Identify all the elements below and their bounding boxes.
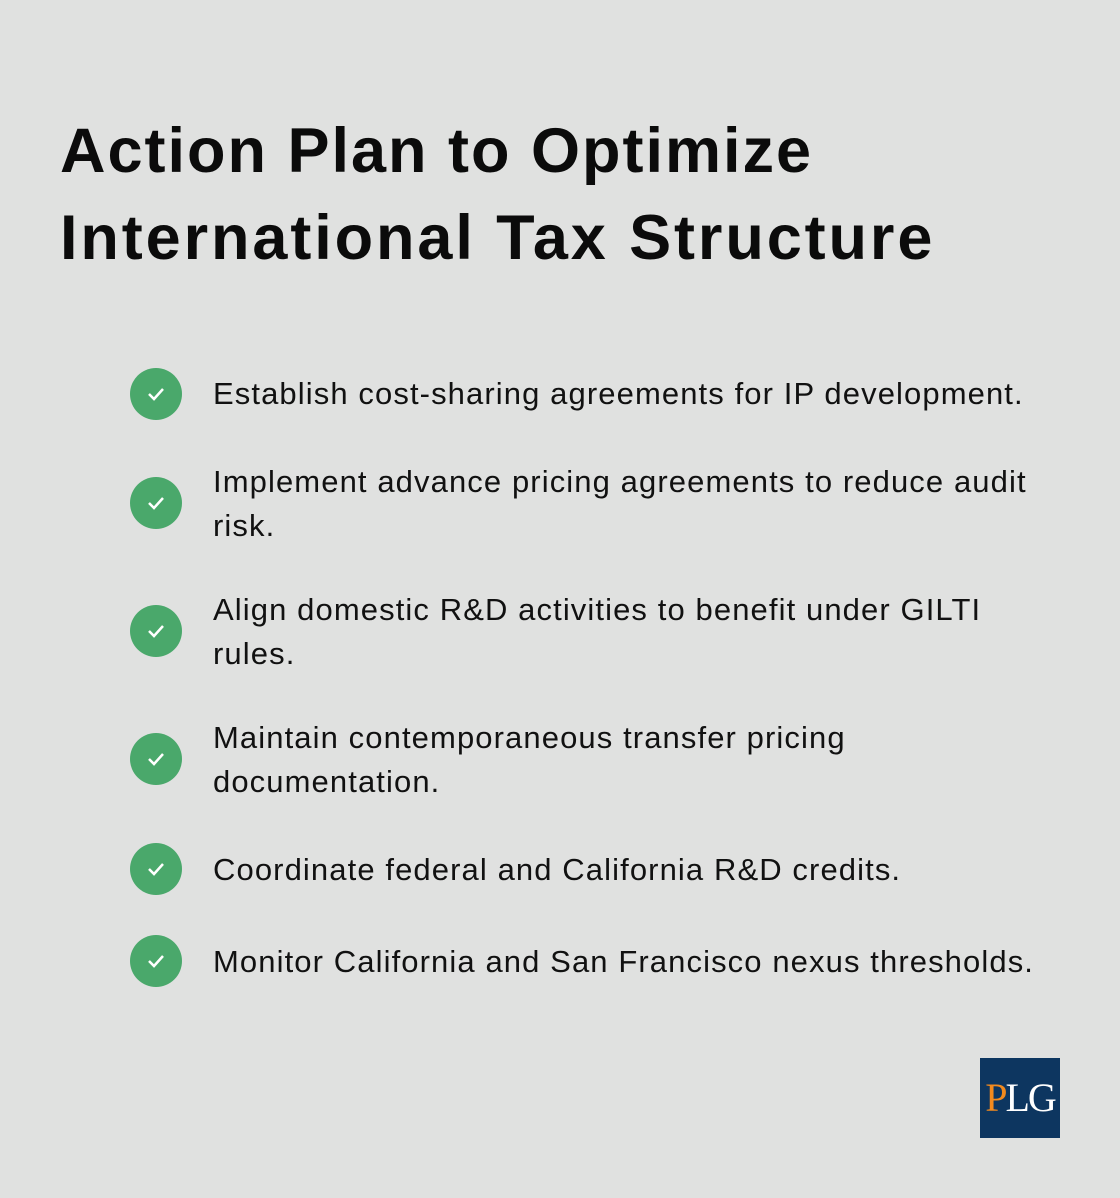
text 4: Maintain contemporaneous transfer pricing xyxy=(213,720,846,755)
icon: check xyxy=(130,368,182,420)
text 2: risk. xyxy=(213,508,275,543)
text 4: documentation. xyxy=(213,764,440,799)
logo: PLG xyxy=(985,1075,1055,1120)
text 3 xyxy=(213,592,981,671)
text 1: Establish cost-sharing agreements for IP development. xyxy=(213,376,1024,411)
item 6 xyxy=(130,935,1034,987)
item 5 xyxy=(130,843,901,895)
icon: check xyxy=(130,935,182,987)
text 3: Align domestic R&D activities to benefit under GILTI xyxy=(213,592,981,627)
item 1 xyxy=(130,368,1024,420)
item 4 xyxy=(130,720,846,799)
icon: check xyxy=(130,843,182,895)
title: Action Plan to Optimize xyxy=(60,116,813,186)
item 3 xyxy=(130,592,981,671)
logo xyxy=(980,1058,1060,1138)
icon: check xyxy=(130,477,182,529)
icon: check xyxy=(130,605,182,657)
text 6: Monitor California and San Francisco nexus thresholds. xyxy=(213,944,1034,979)
text 2: Implement advance pricing agreements to reduce audit xyxy=(213,464,1027,499)
icon: check xyxy=(130,733,182,785)
text 3: rules. xyxy=(213,636,295,671)
text 2 xyxy=(213,464,1027,543)
text 5: Coordinate federal and California R&D credits. xyxy=(213,852,901,887)
title xyxy=(60,116,935,273)
item 2 xyxy=(130,464,1027,543)
title: International Tax Structure xyxy=(60,203,935,273)
text 4 xyxy=(213,720,846,799)
